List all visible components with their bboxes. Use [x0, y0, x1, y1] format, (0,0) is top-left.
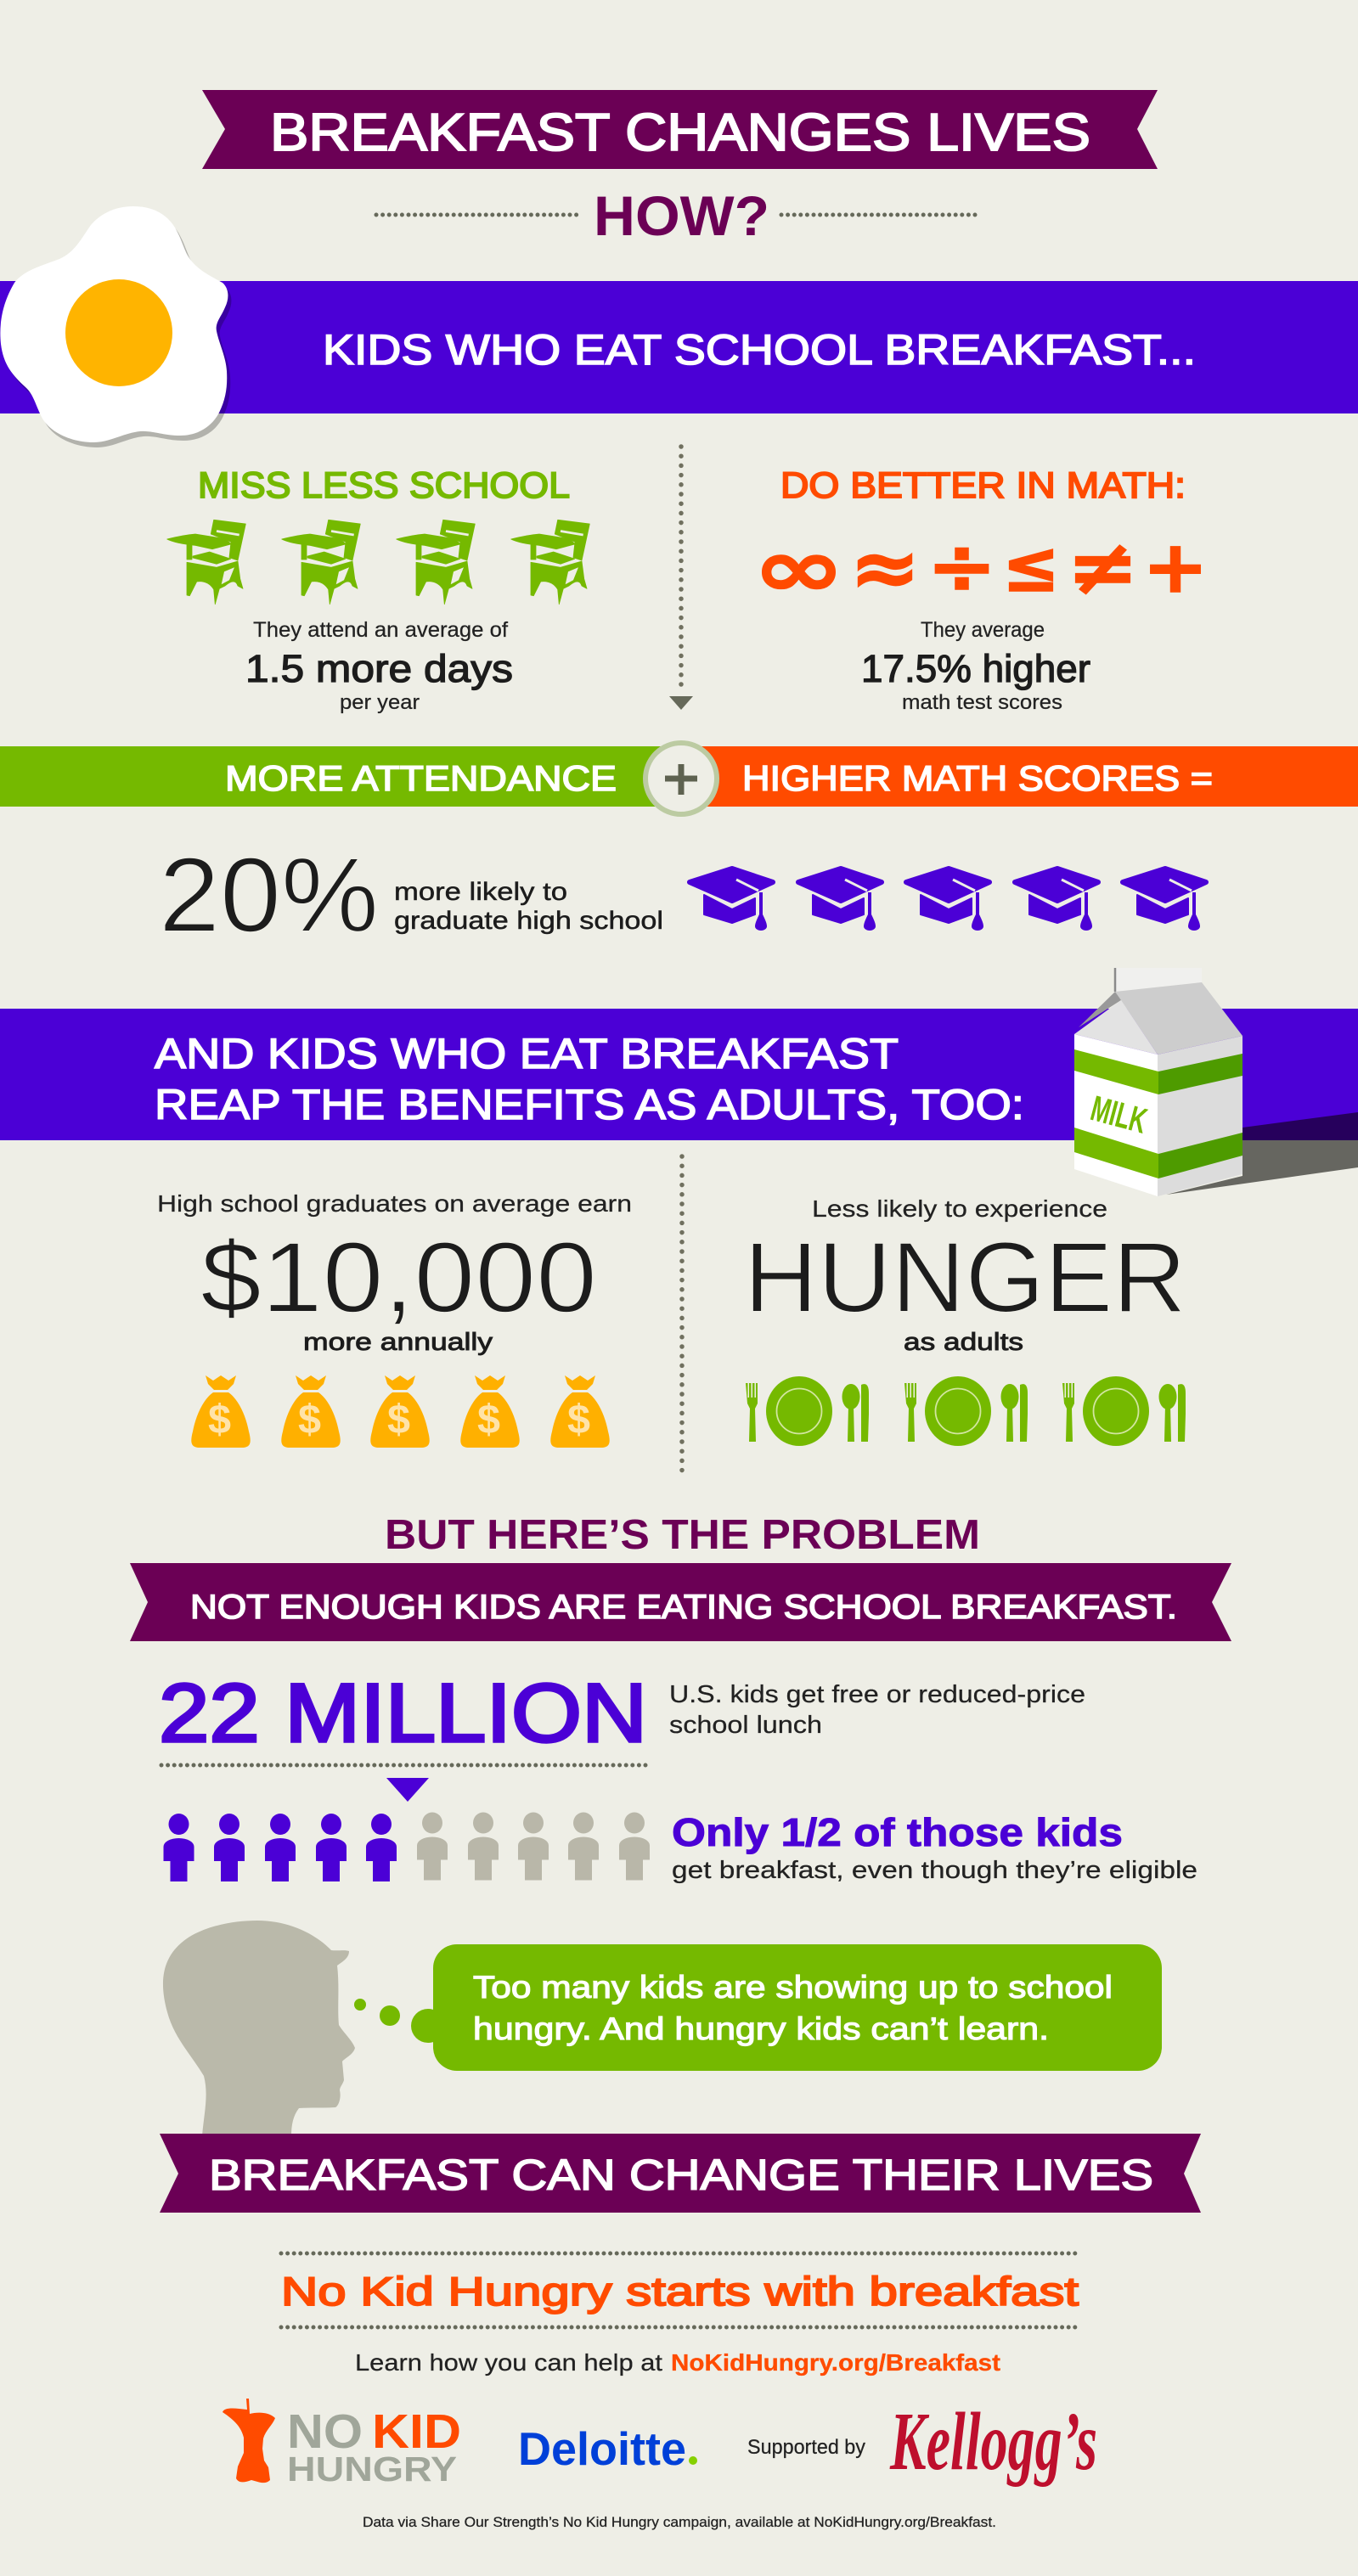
icons: graduation caps: [690, 869, 1206, 931]
icons: math symbols: ≠: [1067, 523, 1139, 612]
icons: money bags: $: [477, 1398, 500, 1443]
call to action: Learn how you can help at: [355, 2349, 662, 2376]
text: attendance stat: 1.5 more days: [245, 647, 513, 690]
icon: milk carton: [1074, 968, 1358, 1196]
icons: money bags: [191, 1375, 610, 1448]
ribbon: not enough kids: [130, 1563, 1231, 1641]
problem heading: BUT HERE’S THE PROBLEM: [385, 1512, 980, 1558]
text: attendance stat: [245, 618, 513, 714]
stat: 20 percent more likely to graduate: graduate high school: [394, 907, 663, 935]
callout: thought bubble: hungry. And hungry kids can’t learn.: [473, 2011, 1049, 2046]
stat: 22 million: school lunch: [669, 1712, 822, 1739]
ribbon: breakfast can change their lives: [160, 2134, 1201, 2213]
panel: hunger: Less likely to experience: [812, 1195, 1107, 1222]
panel: hunger: as adults: [904, 1329, 1023, 1356]
equation bar: HIGHER MATH SCORES =: [742, 758, 1213, 798]
icon: milk carton: MILK: [1087, 1088, 1152, 1141]
text: math stat: They average: [921, 618, 1045, 642]
logo: kellogg's: Kellogg’s: [889, 2396, 1097, 2488]
text: attendance stat: They attend an average of: [253, 618, 508, 642]
stat: only half: Only 1/2 of those kids: [672, 1810, 1123, 1854]
callout: thought bubble: [354, 1944, 1162, 2071]
stat: 22 million: [159, 1667, 1085, 1759]
icons: math symbols: ∞: [752, 522, 845, 616]
icon: fried egg: [0, 206, 231, 447]
icons: money bags: $: [567, 1398, 590, 1443]
icons: row of kids: [163, 1812, 650, 1881]
logo: no kid hungry: HUNGRY: [287, 2449, 457, 2489]
equation bar: MORE ATTENDANCE: [225, 758, 617, 798]
panel: earnings: $10,000: [200, 1222, 597, 1334]
text: math stat: math test scores: [902, 691, 1062, 714]
panel: hunger: [744, 1195, 1186, 1446]
divider: adult benefits: [679, 1156, 685, 1473]
heading: do better in math: DO BETTER IN MATH:: [780, 465, 1186, 506]
panel: earnings: more annually: [303, 1329, 493, 1356]
panel: earnings: [157, 1190, 632, 1448]
stat: only half: get breakfast, even though they’re eligible: [672, 1857, 1197, 1884]
panel: hunger: HUNGER: [744, 1222, 1186, 1334]
heading: miss less school: MISS LESS SCHOOL: [198, 465, 570, 506]
banner: benefits as adults: [0, 1009, 1358, 1140]
divider arrow: school benefits: [669, 447, 693, 710]
icons: place settings: [746, 1376, 1186, 1446]
stat: 22 million: 22 MILLION: [159, 1667, 647, 1759]
banner: kids who eat school breakfast: [0, 281, 1358, 413]
title ribbon: BREAKFAST CHANGES LIVES: [270, 104, 1090, 162]
icons: school desks: [167, 520, 589, 605]
supported by label: Supported by: [747, 2436, 865, 2459]
icons: money bags: $: [298, 1398, 321, 1443]
banner: benefits as adults: AND KIDS WHO EAT BREAKFAST: [155, 1030, 899, 1077]
panel: do better in math: [752, 465, 1209, 714]
stat: 20 percent more likely to graduate: [159, 836, 663, 954]
banner: kids who eat school breakfast: KIDS WHO EAT SCHOOL BREAKFAST...: [323, 326, 1196, 374]
title ribbon: [202, 90, 1158, 169]
banner: benefits as adults: REAP THE BENEFITS AS ADULTS, TOO:: [155, 1081, 1024, 1128]
panel: miss less school: [167, 465, 589, 714]
slogan: no kid hungry: No Kid Hungry starts with breakfast: [281, 2269, 1079, 2314]
stat: 20 percent more likely to graduate: 20%: [159, 836, 379, 954]
icons: math symbols: ÷: [927, 522, 997, 610]
icons: money bags: $: [387, 1398, 410, 1443]
dotted divider with arrow: [161, 1765, 649, 1802]
logo: no kid hungry: [223, 2399, 461, 2489]
how subheading: HOW?: [594, 184, 769, 247]
panel: earnings: High school graduates on average earn: [157, 1190, 632, 1217]
stat: 20 percent more likely to graduate: more likely to: [394, 878, 567, 906]
icons: math symbols: +: [1142, 526, 1209, 610]
logo: deloitte: Deloitte: [518, 2422, 686, 2475]
ribbon: not enough kids: NOT ENOUGH KIDS ARE EATING SCHOOL BREAKFAST.: [190, 1589, 1177, 1626]
text: attendance stat: per year: [340, 691, 420, 714]
icons: math symbols: [752, 522, 1209, 616]
stat: only half: [672, 1810, 1197, 1884]
icons: money bags: $: [208, 1398, 231, 1443]
icons: math symbols: ≈: [849, 522, 921, 615]
icons: math symbols: ≤: [1002, 525, 1060, 608]
call to action: [355, 2349, 1000, 2376]
logo: no kid hungry: NO: [287, 2404, 363, 2459]
callout: thought bubble: Too many kids are showing up to school: [473, 1970, 1113, 2005]
icon: plus circle: [645, 743, 717, 814]
stat: 22 million: U.S. kids get free or reduced-price: [669, 1681, 1085, 1708]
ribbon: breakfast can change their lives: BREAKFAST CAN CHANGE THEIR LIVES: [209, 2151, 1153, 2199]
slogan: no kid hungry: [281, 2253, 1080, 2327]
equation bar: [0, 743, 1358, 814]
text: math stat: [861, 618, 1090, 714]
footnote: data source: Data via Share Our Strength’s No Kid Hungry campaign, available at NoKidHungry.org/Breakfast.: [363, 2514, 996, 2530]
call to action: NoKidHungry.org/Breakfast: [671, 2349, 1000, 2376]
icon: child head silhouette: [163, 1921, 355, 2136]
logo: no kid hungry: KID: [372, 2404, 461, 2459]
text: math stat: 17.5% higher: [861, 647, 1090, 690]
